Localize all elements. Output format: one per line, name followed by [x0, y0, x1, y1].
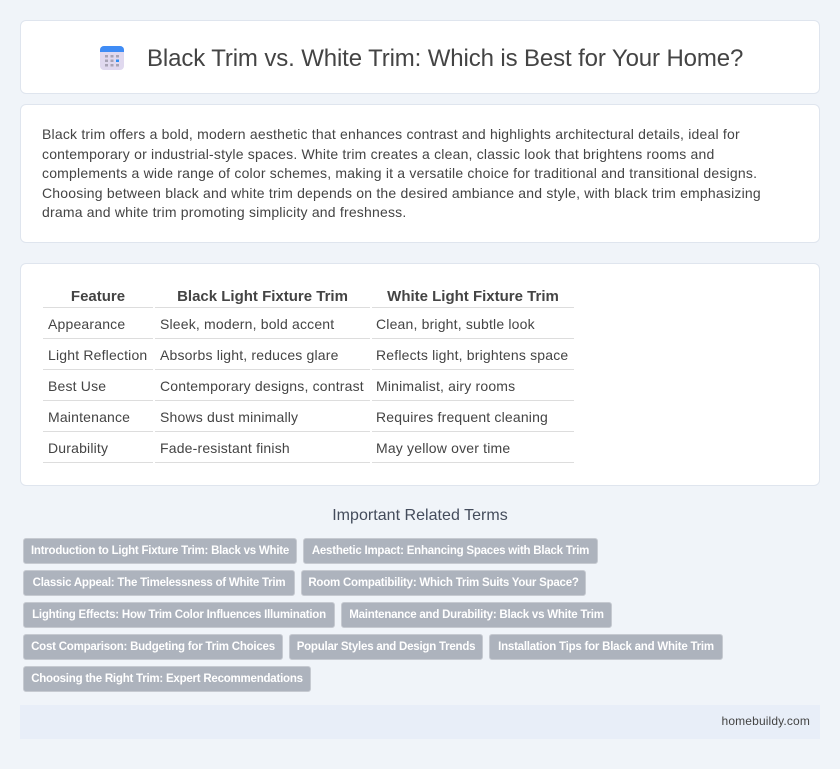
row: Light Reflection: Absorbs light, reduces glare: [160, 347, 339, 363]
title: Black Trim vs. White Trim: Which is Best for Your Home?: [147, 45, 743, 72]
row: Best Use: [48, 378, 515, 394]
chip: Introduction to Light Fixture Trim: Black vs White: [31, 545, 289, 557]
row: Best Use: Best Use: [48, 378, 106, 394]
chip: [289, 634, 483, 660]
chip: Lighting Effects: How Trim Color Influences Illumination: [32, 609, 326, 621]
chip: Cost Comparison: Budgeting for Trim Choices: [31, 641, 275, 653]
chip: Choosing the Right Trim: Expert Recommendations: [31, 673, 303, 685]
table header: White Light Fixture Trim: White Light Fixture Trim: [387, 288, 559, 305]
row: Maintenance: Maintenance: [48, 409, 130, 425]
row: Appearance: Appearance: [48, 316, 125, 332]
chip: [23, 666, 311, 692]
chip: Room Compatibility: Which Trim Suits Your Space?: [308, 577, 579, 589]
chip: Installation Tips for Black and White Trim: [498, 641, 714, 653]
text block: intro paragraph: contemporary or industrial-style spaces. White trim creates a clean, classic look that brightens rooms and: [42, 146, 714, 162]
text block: intro paragraph: drama and white trim promoting simplicity and freshness.: [42, 204, 406, 220]
row: Durability: May yellow over time: [376, 440, 510, 456]
panel: header: [20, 20, 820, 94]
text block: intro paragraph: complements a wide range of color schemes, making it a versatile choice for traditional and transitional designs.: [42, 165, 757, 181]
chip: [303, 538, 598, 564]
heading: related terms: Important Related Terms: [332, 507, 508, 524]
chip: [23, 634, 283, 660]
row: Light Reflection: Light Reflection: [48, 347, 147, 363]
chip: [23, 602, 335, 628]
footer text: homebuildy.com: [722, 714, 810, 728]
row: Durability: Fade-resistant finish: [160, 440, 290, 456]
chip: [341, 602, 612, 628]
icon: calendar: [100, 46, 124, 70]
text block: intro paragraph: Black trim offers a bold, modern aesthetic that enhances contrast and highlights architectural details, ideal for: [42, 126, 740, 142]
chip: Popular Styles and Design Trends: [297, 641, 475, 653]
row: Maintenance: Shows dust minimally: [160, 409, 298, 425]
text block: intro paragraph: [42, 126, 761, 220]
chip: [23, 538, 297, 564]
row: Appearance: Clean, bright, subtle look: [376, 316, 535, 332]
row: Appearance: [48, 316, 535, 332]
table header: Feature: Feature: [71, 288, 125, 305]
row: Light Reflection: [48, 347, 568, 363]
row: Best Use: Minimalist, airy rooms: [376, 378, 515, 394]
row: Best Use: Contemporary designs, contrast: [160, 378, 364, 394]
chip: Aesthetic Impact: Enhancing Spaces with Black Trim: [312, 545, 589, 557]
row: Durability: Durability: [48, 440, 108, 456]
panel: comparison table: [20, 263, 820, 486]
row: Maintenance: Requires frequent cleaning: [376, 409, 548, 425]
panel: intro: [20, 104, 820, 243]
text block: intro paragraph: Choosing between black and white trim depends on the desired ambiance and style, with black trim emphasizing: [42, 185, 761, 201]
footer: [20, 705, 820, 739]
chip: [301, 570, 586, 596]
chip: Maintenance and Durability: Black vs White Trim: [349, 609, 604, 621]
row: Light Reflection: Reflects light, brightens space: [376, 347, 568, 363]
chip: Classic Appeal: The Timelessness of White Trim: [33, 577, 285, 589]
table header: Black Light Fixture Trim: Black Light Fixture Trim: [177, 288, 348, 305]
row: Durability: [48, 440, 510, 456]
chip: [23, 570, 295, 596]
chip: [489, 634, 723, 660]
row: Appearance: Sleek, modern, bold accent: [160, 316, 334, 332]
row: Maintenance: [48, 409, 548, 425]
